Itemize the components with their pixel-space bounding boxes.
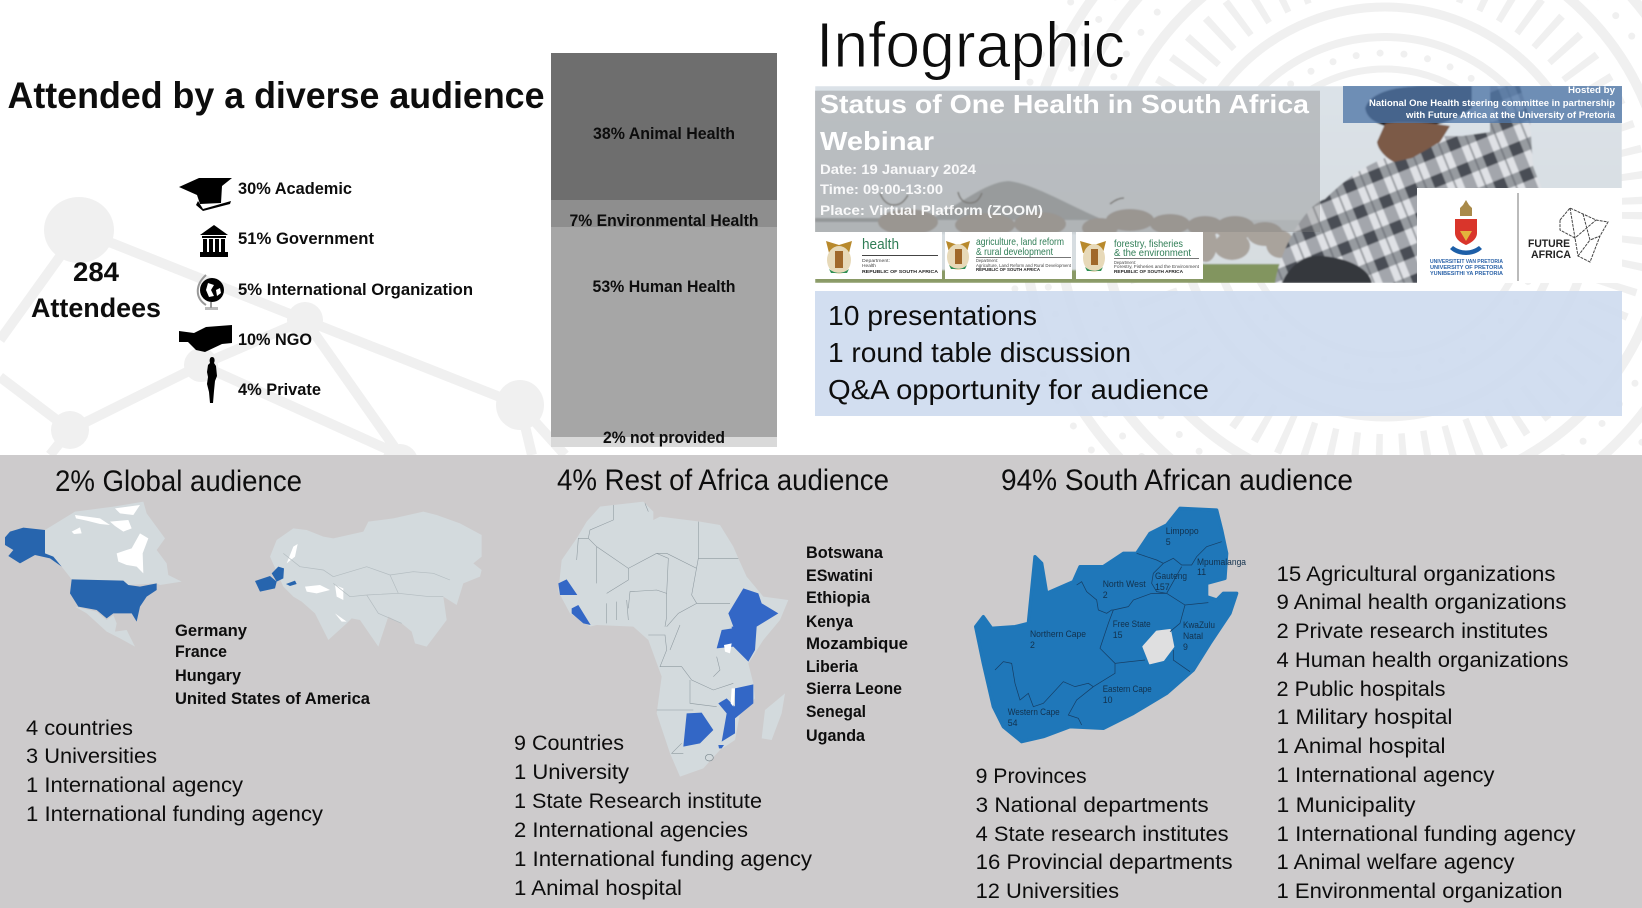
statistics list: 1 International funding agency — [26, 802, 323, 826]
statistics list: 9 Countries — [514, 731, 624, 755]
statistics list: organizations: 1 Environmental organization — [1276, 879, 1562, 903]
logo: agriculture, land reform and rural development: & rural development — [976, 246, 1053, 258]
logos: university of pretoria and future africa: UNIVERSITY OF PRETORIA — [1430, 265, 1504, 271]
province labels: 15 — [1113, 630, 1123, 640]
label: government: 51% Government — [238, 230, 375, 248]
heading: global audience: 2% Global audience — [55, 465, 302, 498]
countries list: Ethiopia — [806, 589, 871, 607]
webinar title and details: Date: 19 January 2024 — [820, 161, 976, 177]
bar segment: human health — [551, 227, 777, 437]
map: south african provinces — [976, 508, 1246, 742]
countries list: Kenya — [806, 613, 854, 631]
panel: global audience — [5, 465, 482, 826]
statistics list: organizations: 1 International funding agency — [1276, 822, 1576, 846]
statistics list — [514, 731, 812, 900]
countries list: Liberia — [806, 658, 859, 676]
logo: department of health: Health — [862, 263, 876, 268]
logo: agriculture, land reform and rural development — [945, 232, 1072, 279]
statistics list: organizations: 1 International agency — [1276, 763, 1495, 787]
countries list — [175, 622, 371, 708]
logo: forestry, fisheries and the environment: & the environment — [1114, 247, 1191, 259]
statistics list: government and academic: 16 Provincial departments — [976, 850, 1233, 874]
province labels: Eastern Cape — [1103, 684, 1152, 694]
statistics list: organizations: 2 Public hospitals — [1276, 677, 1446, 701]
statistics list: organizations: 1 Animal welfare agency — [1276, 850, 1515, 874]
logo: forestry, fisheries and the environment: forestry, fisheries — [1114, 238, 1183, 250]
panel: south african audience — [976, 464, 1576, 903]
logo: agriculture, land reform and rural development: REPUBLIC OF SOUTH AFRICA — [976, 267, 1041, 272]
bar label: human health: 53% Human Health — [592, 278, 736, 296]
icon: person silhouette — [207, 357, 217, 403]
logos: university of pretoria and future africa: AFRICA — [1531, 249, 1571, 261]
statistics list: organizations: 1 Municipality — [1276, 793, 1416, 817]
logo: agriculture, land reform and rural development: Department: — [976, 258, 998, 263]
bar segment: environmental health — [551, 200, 777, 227]
province labels: 9 — [1183, 642, 1188, 652]
province labels: 2 — [1103, 590, 1108, 600]
statistics list: organizations: 1 Animal hospital — [1276, 734, 1446, 758]
logos: university of pretoria and future africa — [1417, 188, 1622, 283]
statistics list: organizations: 1 Military hospital — [1276, 705, 1452, 729]
province labels: 11 — [1197, 567, 1206, 577]
icon: university crest — [1450, 200, 1482, 255]
statistics list: government and academic: 9 Provinces — [976, 764, 1087, 788]
province labels: 10 — [1103, 695, 1113, 705]
label: ngo: 10% NGO — [238, 331, 312, 349]
logos: university of pretoria and future africa: YUNIBESITHI YA PRETORIA — [1430, 271, 1504, 277]
bar label: environmental health: 7% Environmental Health — [570, 212, 758, 230]
webinar banner — [815, 85, 1622, 283]
province labels: Western Cape — [1008, 707, 1060, 717]
statistics list: organizations: 4 Human health organizations — [1276, 648, 1568, 672]
statistics list: 4 countries — [26, 716, 133, 740]
countries list: Hungary — [175, 667, 242, 685]
statistics list: government and academic: 4 State research institutes — [976, 822, 1229, 846]
countries list: Germany — [175, 622, 248, 640]
logo: forestry, fisheries and the environment: REPUBLIC OF SOUTH AFRICA — [1114, 269, 1184, 274]
bar segment: animal health — [551, 53, 777, 200]
province labels: 157 — [1155, 582, 1170, 592]
bar label: animal health: 38% Animal Health — [593, 125, 735, 143]
province labels: Free State — [1113, 619, 1151, 629]
hosted by panel: with Future Africa at the University of Pretoria — [1405, 110, 1616, 121]
map: north america and eurasia — [5, 502, 482, 647]
heading: rest of africa audience: 4% Rest of Africa audience — [557, 464, 889, 497]
province labels: 5 — [1166, 537, 1171, 547]
province labels: Limpopo — [1166, 526, 1199, 536]
background pattern: network and concentric rings — [0, 0, 1642, 455]
icon: government building — [200, 225, 228, 257]
icon: graduation cap on book — [179, 178, 232, 211]
title: infographic: Infographic — [816, 9, 1125, 81]
logo: forestry, fisheries and the environment — [1076, 232, 1203, 279]
logo: forestry, fisheries and the environment: Forestry, Fisheries and the Environment — [1114, 264, 1200, 269]
statistics list: 1 International funding agency — [514, 847, 812, 871]
statistics list: 1 Animal hospital — [514, 876, 682, 900]
webinar title and details: Webinar — [820, 126, 934, 156]
logos: university of pretoria and future africa: FUTURE — [1528, 238, 1570, 250]
logo: department of health: health — [862, 236, 899, 253]
label: private: 4% Private — [238, 381, 321, 399]
programme box: 1 round table discussion — [828, 337, 1131, 368]
logo: agriculture, land reform and rural development: Agriculture, Land Reform and Rural Development — [976, 263, 1072, 268]
banner photo: sky, mountain, cattle and farmer — [815, 86, 1622, 283]
statistics list: 1 International agency — [26, 773, 243, 797]
countries list: Botswana — [806, 544, 884, 562]
province labels: Mpumalanga — [1197, 557, 1246, 567]
province labels: Northern Cape — [1030, 629, 1086, 639]
province labels: Gauteng — [1155, 571, 1187, 581]
statistics list: organizations: 2 Private research institutes — [1276, 619, 1548, 643]
webinar title and details: Status of One Health in South Africa — [820, 89, 1310, 119]
province labels: KwaZulu — [1183, 620, 1215, 630]
province labels — [1008, 526, 1246, 728]
stacked bar: audience sector — [551, 53, 777, 447]
programme box: 10 presentations — [828, 300, 1037, 331]
banner overlay panel — [815, 91, 1320, 232]
statistics list: 1 State Research institute — [514, 789, 762, 813]
logos: university of pretoria and future africa: UNIVERSITEIT VAN PRETORIA — [1430, 259, 1504, 265]
province labels: Natal — [1183, 631, 1203, 641]
geography panel background — [0, 455, 1642, 908]
webinar title and details: Place: Virtual Platform (ZOOM) — [820, 202, 1043, 218]
heading: attended by a diverse audience: Attended by a diverse audience — [8, 75, 544, 116]
icon: handshake — [179, 325, 232, 352]
hosted by panel — [1343, 85, 1622, 123]
countries list — [806, 544, 908, 745]
statistics list: organizations — [1276, 562, 1576, 903]
hosted by panel: Hosted by — [1568, 85, 1616, 96]
audience type legend — [179, 178, 473, 403]
province labels: 54 — [1008, 718, 1018, 728]
panel: rest of africa audience — [514, 464, 908, 900]
statistics list: organizations: 15 Agricultural organizations — [1276, 562, 1556, 586]
statistics list — [26, 716, 323, 826]
icon: globe on stand — [198, 275, 224, 310]
statistics list: organizations: 9 Animal health organizations — [1276, 590, 1566, 614]
bar segment: not provided — [551, 437, 777, 447]
icon: future africa network — [1560, 208, 1608, 262]
logo: department of health — [815, 232, 942, 279]
statistics list: government and academic: 3 National departments — [976, 793, 1209, 817]
countries list: Uganda — [806, 727, 866, 745]
province labels: 2 — [1030, 640, 1035, 650]
attendee count: 284 — [73, 257, 119, 287]
countries list: France — [175, 643, 227, 661]
logo: department of health: REPUBLIC OF SOUTH AFRICA — [862, 269, 939, 274]
programme box: Q&A opportunity for audience — [828, 374, 1209, 405]
webinar title and details — [820, 89, 1310, 218]
label: academic: 30% Academic — [238, 180, 352, 198]
logo: agriculture, land reform and rural development: agriculture, land reform — [976, 236, 1064, 248]
province labels: North West — [1103, 579, 1146, 589]
programme box — [815, 291, 1622, 416]
countries list: Mozambique — [806, 635, 908, 653]
label: international organization: 5% International Organization — [238, 281, 473, 299]
logo: department of health: Department: — [862, 258, 890, 263]
statistics list: 1 University — [514, 760, 629, 784]
statistics list: government and academic — [976, 764, 1233, 903]
attendee count — [31, 257, 161, 323]
bar label: not provided: 2% not provided — [603, 429, 725, 447]
countries list: ESwatini — [806, 567, 873, 585]
statistics list: government and academic: 12 Universities — [976, 879, 1119, 903]
attendee count: Attendees — [31, 293, 161, 323]
statistics list: 2 International agencies — [514, 818, 748, 842]
countries list: Sierra Leone — [806, 680, 902, 698]
statistics list: 3 Universities — [26, 744, 157, 768]
countries list: Senegal — [806, 703, 866, 721]
countries list: United States of America — [175, 690, 371, 708]
farmer shirt — [1275, 86, 1541, 283]
webinar title and details: Time: 09:00-13:00 — [820, 181, 943, 197]
logo: forestry, fisheries and the environment: Department: — [1114, 260, 1136, 265]
heading: south african audience: 94% South African audience — [1001, 464, 1353, 497]
hosted by panel: National One Health steering committee in partnership — [1369, 98, 1615, 109]
map: africa — [558, 502, 788, 777]
